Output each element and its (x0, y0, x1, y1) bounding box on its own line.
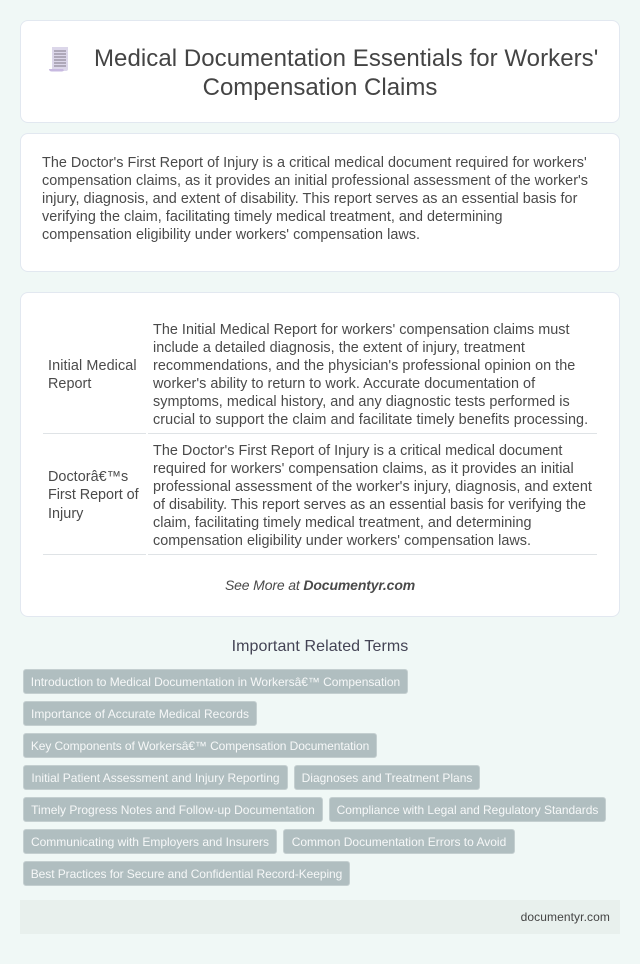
footer bar (20, 900, 620, 934)
row: initial medical report (48, 322, 588, 428)
tag: Best Practices for Secure and Confidential Record-Keeping (31, 867, 342, 881)
tag (23, 733, 377, 758)
row description (153, 322, 588, 428)
title (94, 45, 598, 101)
tag: Importance of Accurate Medical Records (31, 707, 249, 721)
row: doctor's first report (48, 443, 592, 549)
related terms tags (23, 669, 606, 886)
related terms heading: Important Related Terms (232, 638, 408, 655)
row description: crucial to support the claim and facilitate timely benefits processing. (153, 412, 588, 428)
icon: document (49, 47, 68, 72)
table panel (20, 292, 620, 617)
row description: compensation eligibility under workers' compensation laws. (153, 533, 531, 549)
see more link: See More at Documentyr.com (225, 577, 415, 593)
row description: include a detailed diagnosis, the extent of injury, treatment (153, 340, 525, 356)
summary panel (20, 133, 620, 272)
tag: Common Documentation Errors to Avoid (292, 835, 506, 849)
summary text: The Doctor's First Report of Injury is a critical medical document required for workers' (42, 155, 587, 171)
tag: Introduction to Medical Documentation in Workersâ€™ Compensation (31, 675, 400, 689)
summary text: verifying the claim, facilitating timely medical treatment, and determining (42, 209, 503, 225)
row label: Doctorâ€™s (48, 469, 128, 485)
row label: Report (48, 376, 91, 392)
row label (48, 358, 137, 392)
summary text: injury, diagnosis, and extent of disability. This report serves as an essential basis for (42, 191, 577, 207)
row description: claim, facilitating timely medical treatment, and determining (153, 515, 532, 531)
tag (283, 829, 515, 854)
row description: The Initial Medical Report for workers' compensation claims must (153, 322, 570, 338)
tag (23, 669, 408, 694)
tag (294, 765, 480, 790)
title: Compensation Claims (203, 74, 437, 101)
tag (329, 797, 606, 822)
tag (23, 765, 288, 790)
tag (23, 861, 350, 886)
row description: required for workers' compensation claims, as it provides an initial (153, 461, 574, 477)
header panel (20, 20, 620, 123)
row label: Initial Medical (48, 358, 137, 374)
tag (23, 701, 257, 726)
summary text (42, 155, 588, 243)
row label: First Report of (48, 487, 139, 503)
tag: Communicating with Employers and Insurers (31, 835, 269, 849)
tag (23, 797, 323, 822)
tag: Initial Patient Assessment and Injury Reporting (31, 771, 280, 785)
row label (48, 469, 139, 522)
title: Medical Documentation Essentials for Workers' (94, 45, 598, 72)
tag: Timely Progress Notes and Follow-up Documentation (31, 803, 315, 817)
row description: recommendations, and the physician's professional opinion on the (153, 358, 575, 374)
tag: Diagnoses and Treatment Plans (302, 771, 472, 785)
row description: symptoms, medical history, and any diagnostic tests performed is (153, 394, 570, 410)
tag (23, 829, 277, 854)
row description: The Doctor's First Report of Injury is a critical medical document (153, 443, 562, 459)
tag: Compliance with Legal and Regulatory Standards (337, 803, 598, 817)
footer text: documentyr.com (521, 910, 610, 924)
row description: professional assessment of the worker's injury, diagnosis, and extent (153, 479, 592, 495)
summary text: compensation claims, as it provides an initial professional assessment of the worker's (42, 173, 588, 189)
row description (153, 443, 592, 549)
summary text: compensation eligibility under workers' compensation laws. (42, 227, 420, 243)
row description: worker's ability to return to work. Accurate documentation of (153, 376, 535, 392)
row description: of disability. This report serves as an essential basis for verifying the (153, 497, 586, 513)
tag: Key Components of Workersâ€™ Compensation Documentation (31, 739, 369, 753)
row label: Injury (48, 506, 83, 522)
